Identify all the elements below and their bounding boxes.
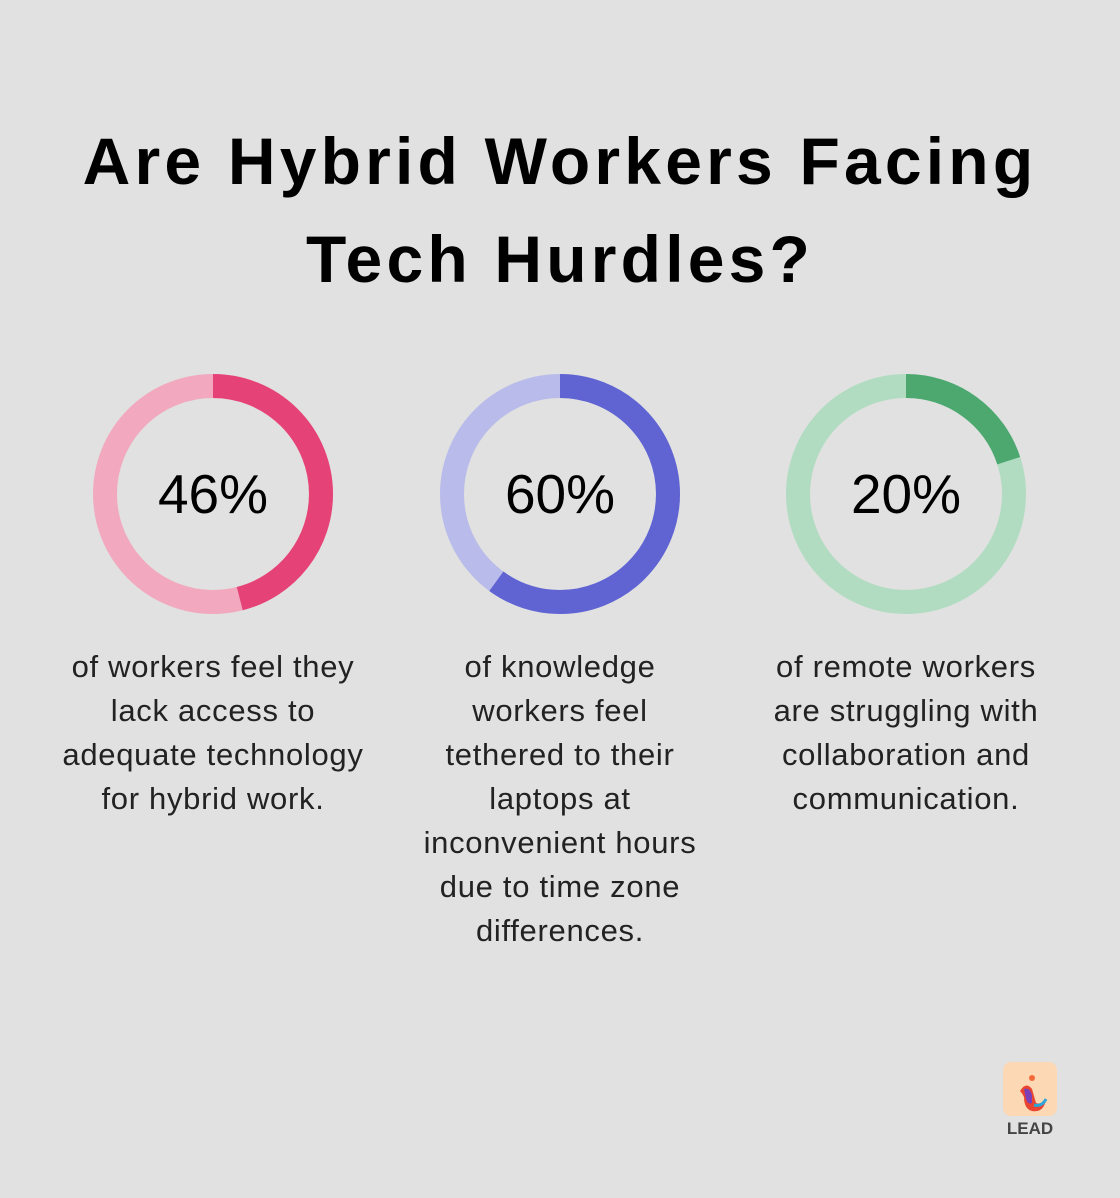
text: 60% description: differences. — [476, 913, 644, 948]
text: 46% description — [62, 649, 364, 816]
donut: 60%: 60% — [505, 463, 615, 525]
logo: LEAD: LEAD — [1007, 1119, 1053, 1138]
text: 46% description: for hybrid work. — [101, 781, 325, 816]
donut: 20%: 20% — [851, 463, 961, 525]
logo: LEAD — [1003, 1062, 1057, 1138]
text: 20% description — [774, 649, 1038, 816]
text: 46% description: adequate technology — [62, 737, 364, 772]
text: 60% description — [424, 649, 696, 948]
text: 20% description: communication. — [793, 781, 1019, 816]
donut: 46%: 46% — [158, 463, 268, 525]
text: 60% description: of knowledge — [464, 649, 656, 684]
title: Are Hybrid Workers Facing — [83, 124, 1037, 198]
text: 20% description: are struggling with — [774, 693, 1038, 728]
text: 60% description: inconvenient hours — [424, 825, 696, 860]
title: Tech Hurdles? — [306, 222, 814, 296]
text: 20% description: collaboration and — [782, 737, 1030, 772]
text: 46% description: of workers feel they — [72, 649, 354, 684]
text: 60% description: laptops at — [489, 781, 631, 816]
text: 20% description: of remote workers — [776, 649, 1036, 684]
text: 60% description: workers feel — [472, 693, 648, 728]
text: 60% description: due to time zone — [440, 869, 680, 904]
text: 60% description: tethered to their — [445, 737, 675, 772]
donut: 46% — [93, 374, 333, 614]
donut: 20% — [786, 374, 1026, 614]
donut: 60% — [440, 374, 680, 614]
text: 46% description: lack access to — [111, 693, 315, 728]
title — [83, 124, 1037, 296]
